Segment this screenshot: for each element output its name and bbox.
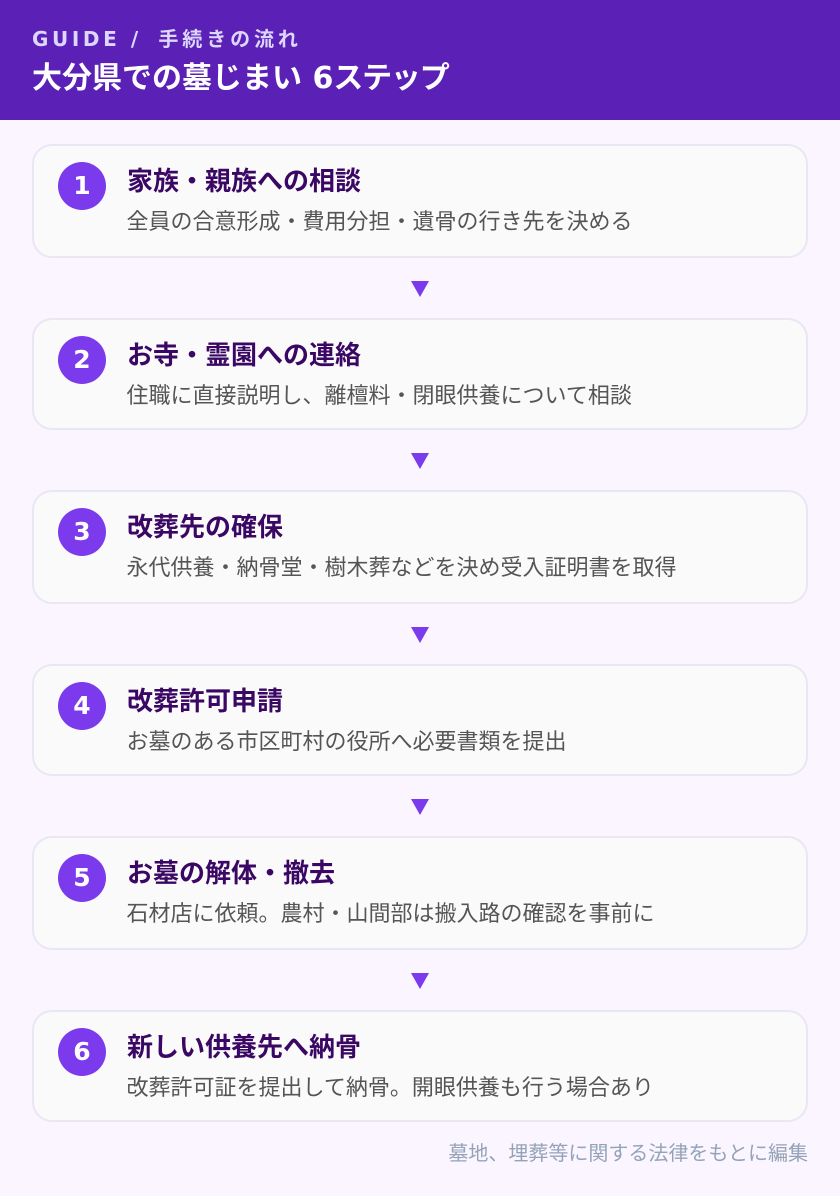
arrow 5 to 6 (411, 973, 429, 989)
panel: step 3 (32, 490, 808, 604)
arrow 3 to 4 (411, 627, 429, 643)
step 2 number (58, 336, 106, 384)
panel: step 6 (32, 1010, 808, 1122)
step 5 number: 5 (73, 863, 91, 892)
step 5 heading: お墓の解体・撤去 (127, 859, 335, 889)
arrow 1 to 2 (411, 281, 429, 297)
step 3 description: 永代供養・納骨堂・樹木葬などを決め受入証明書を取得 (126, 556, 677, 581)
step 1 description: 全員の合意形成・費用分担・遺骨の行き先を決める (126, 210, 633, 235)
step 6 description: 改葬許可証を提出して納骨。開眼供養も行う場合あり (126, 1076, 654, 1101)
title: 大分県での墓じまい 6ステップ (32, 61, 449, 96)
step 6 heading: 新しい供養先へ納骨 (127, 1033, 361, 1063)
step 5 description: 石材店に依頼。農村・山間部は搬入路の確認を事前に (126, 902, 655, 927)
step 3 number (58, 508, 106, 556)
step 1 heading: 家族・親族への相談 (127, 167, 361, 197)
step 4 description: お墓のある市区町村の役所へ必要書類を提出 (126, 730, 567, 755)
step 4 number: 4 (73, 691, 91, 720)
panel: step 1 (32, 144, 808, 258)
step 2 description: 住職に直接説明し、離檀料・閉眼供養について相談 (126, 384, 632, 409)
step 6 number: 6 (73, 1037, 91, 1066)
step 2 number: 2 (73, 345, 91, 374)
step 6 number (58, 1028, 106, 1076)
panel: step 4 (32, 664, 808, 776)
step 1 number (58, 162, 106, 210)
panel: step 5 (32, 836, 808, 950)
header band (0, 0, 840, 120)
step 5 number (58, 854, 106, 902)
header label: GUIDE / 手続きの流れ (32, 27, 302, 51)
arrow 2 to 3 (411, 453, 429, 469)
panel: step 2 (32, 318, 808, 430)
footer source note: 墓地、埋葬等に関する法律をもとに編集 (448, 1141, 808, 1165)
step 4 heading: 改葬許可申請 (127, 687, 283, 717)
step 2 heading: お寺・霊園への連絡 (127, 341, 361, 371)
step 3 number: 3 (73, 517, 91, 546)
arrow 4 to 5 (411, 799, 429, 815)
step 4 number (58, 682, 106, 730)
step 3 heading: 改葬先の確保 (127, 513, 283, 543)
step 1 number: 1 (73, 171, 91, 200)
